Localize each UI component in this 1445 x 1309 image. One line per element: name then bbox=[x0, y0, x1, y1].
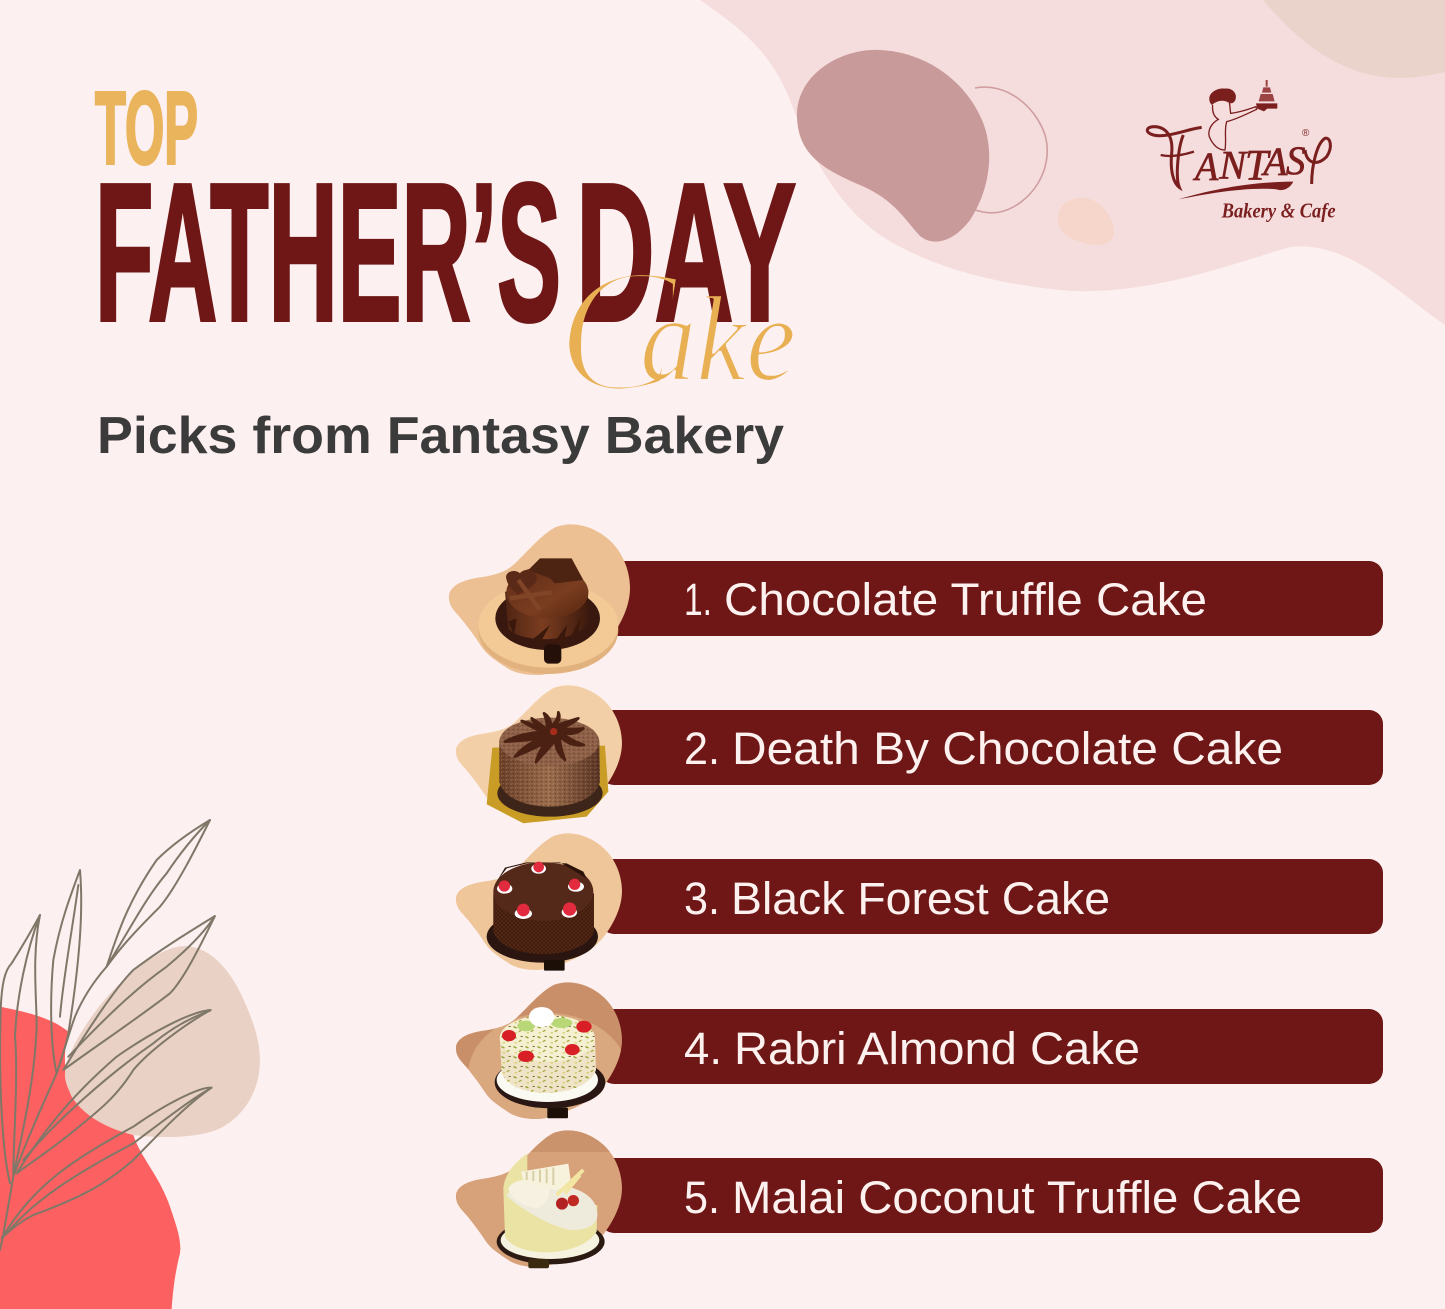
subtitle: Picks from Fantasy Bakery bbox=[97, 407, 784, 465]
bar 2 label: 2. bbox=[684, 723, 720, 774]
bar 4 bbox=[600, 1009, 1383, 1084]
bar 3 bbox=[600, 859, 1383, 934]
logo: Fantasy Bakery & Cafe bbox=[1147, 80, 1336, 222]
list item 4 bbox=[456, 982, 1383, 1119]
logo flourish on F bbox=[1147, 127, 1202, 187]
bar 5 bbox=[600, 1158, 1383, 1233]
bar 5 label: Malai Coconut Truffle Cake bbox=[732, 1172, 1302, 1223]
logo wordmark: T bbox=[1245, 141, 1271, 189]
cake 3: black forest bbox=[487, 862, 598, 971]
decoration: coral blob, beige blob and line-art leaves bbox=[0, 820, 260, 1309]
cake 1: chocolate truffle bbox=[478, 558, 618, 674]
title: Cake script bbox=[556, 231, 796, 429]
logo Y flourish bbox=[1305, 138, 1330, 184]
logo wordmark: A bbox=[1260, 139, 1288, 184]
bar 1 label: 1. bbox=[684, 574, 712, 625]
bar 5 label: 5. bbox=[684, 1172, 720, 1223]
registered mark: ® bbox=[1302, 128, 1310, 139]
bar 4 label: Rabri Almond Cake bbox=[734, 1023, 1140, 1074]
list item 2 bbox=[456, 685, 1383, 823]
bar 3 label: 3. bbox=[684, 873, 720, 924]
title: FATHER'S DAY: DAY bbox=[576, 143, 796, 362]
blob 5 top shade bbox=[530, 1130, 610, 1152]
title: Cake script: C bbox=[556, 231, 680, 429]
text: TOP bbox=[95, 70, 198, 186]
icon: chef holding a cake bbox=[1209, 80, 1277, 150]
bar 2 label: Death By Chocolate Cake bbox=[732, 723, 1283, 774]
logo wordmark bbox=[1192, 138, 1305, 189]
blob 1 bbox=[449, 524, 630, 675]
logo wordmark: A bbox=[1192, 144, 1219, 189]
logo wordmark: N bbox=[1218, 142, 1248, 187]
logo wordmark: S bbox=[1286, 138, 1305, 183]
blob 5 bbox=[456, 1130, 622, 1267]
blob 2 bbox=[456, 685, 622, 822]
bar 3 label: Black Forest Cake bbox=[731, 873, 1110, 924]
bar 1 bbox=[600, 561, 1383, 636]
cake 2: death by chocolate bbox=[487, 712, 608, 823]
title: FATHER'S DAY: FATHER’S bbox=[95, 143, 561, 362]
list item 1 bbox=[449, 524, 1383, 675]
title: Cake script: ake bbox=[640, 272, 796, 407]
bar 1 label: Chocolate Truffle Cake bbox=[724, 574, 1207, 625]
logo tagline: Bakery & Cafe bbox=[1221, 200, 1336, 222]
blob 4 highlight bbox=[468, 1013, 621, 1119]
list item 5 bbox=[456, 1125, 1383, 1268]
bar 2 bbox=[600, 710, 1383, 785]
blob 3 bbox=[456, 833, 622, 970]
blob 4 bbox=[456, 982, 622, 1119]
bar 4 label: 4. bbox=[684, 1023, 722, 1074]
cake 5: malai coconut truffle bbox=[497, 1153, 605, 1268]
logo swoosh bbox=[1178, 182, 1293, 199]
decorative blobs: top right bbox=[700, 0, 1445, 325]
cake 4: rabri almond bbox=[495, 1007, 605, 1118]
list item 3 bbox=[456, 833, 1383, 971]
